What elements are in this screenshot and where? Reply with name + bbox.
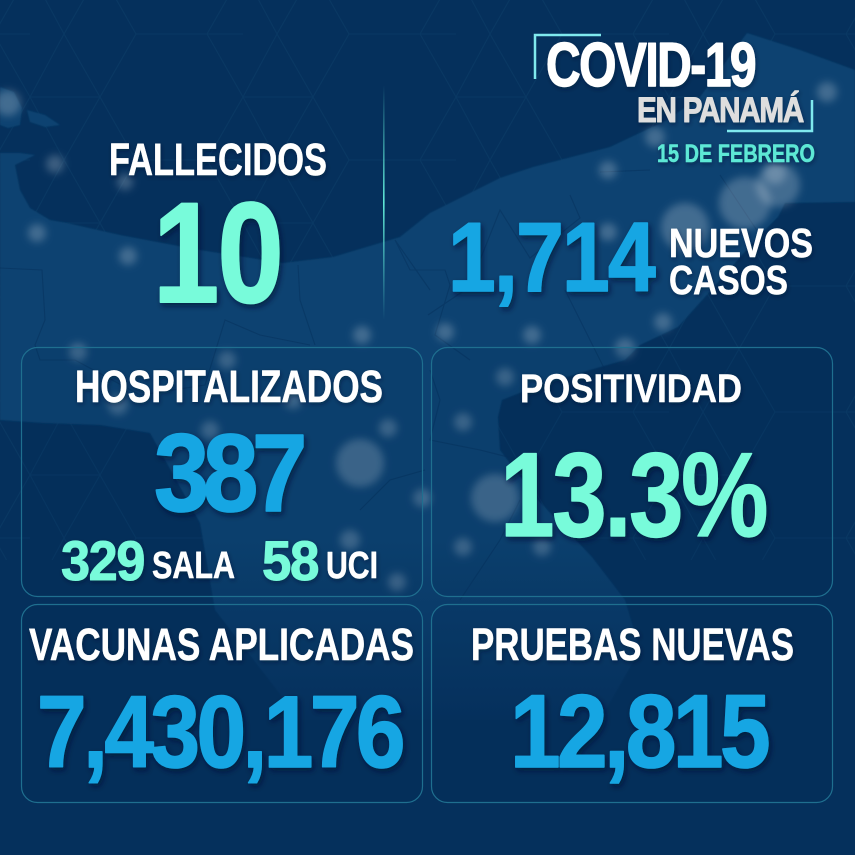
vertical divider bbox=[383, 85, 385, 320]
panel: vacunas aplicadas bbox=[22, 604, 422, 802]
heading: vacunas aplicadas: VACUNAS APLICADAS bbox=[29, 619, 414, 670]
title block bbox=[535, 31, 815, 168]
number: 1,714: 1,714 bbox=[448, 202, 655, 312]
label: nuevos: NUEVOS bbox=[669, 220, 813, 266]
number: 329: 329 bbox=[61, 529, 144, 592]
heading: fallecidos: FALLECIDOS bbox=[109, 134, 327, 185]
label: casos: CASOS bbox=[669, 257, 788, 303]
label: uci: UCI bbox=[326, 545, 378, 587]
date: 15 DE FEBRERO bbox=[657, 140, 815, 168]
number: 58: 58 bbox=[262, 529, 318, 592]
number: 7,430,176: 7,430,176 bbox=[37, 675, 403, 789]
number: 12,815: 12,815 bbox=[510, 674, 768, 790]
title: COVID-19: COVID-19 bbox=[546, 31, 755, 100]
heading: positividad: POSITIVIDAD bbox=[520, 367, 742, 411]
panel: hospitalizados bbox=[22, 348, 422, 596]
number: 10: 10 bbox=[153, 174, 282, 333]
stat: fallecidos bbox=[109, 134, 327, 333]
title bracket bottom right bbox=[727, 100, 812, 131]
label: sala: SALA bbox=[152, 545, 235, 587]
number: 13.3%: 13.3% bbox=[500, 428, 766, 562]
glowing dots bbox=[0, 82, 837, 591]
heading: hospitalizados: HOSPITALIZADOS bbox=[75, 361, 383, 412]
title bracket top left bbox=[535, 35, 601, 79]
number: 387: 387 bbox=[154, 412, 304, 535]
subtitle: EN PANAMÁ: EN PANAMÁ bbox=[637, 90, 804, 130]
panel: pruebas nuevas bbox=[432, 604, 832, 802]
stat: nuevos casos bbox=[448, 202, 813, 312]
panel: positividad bbox=[432, 348, 832, 596]
